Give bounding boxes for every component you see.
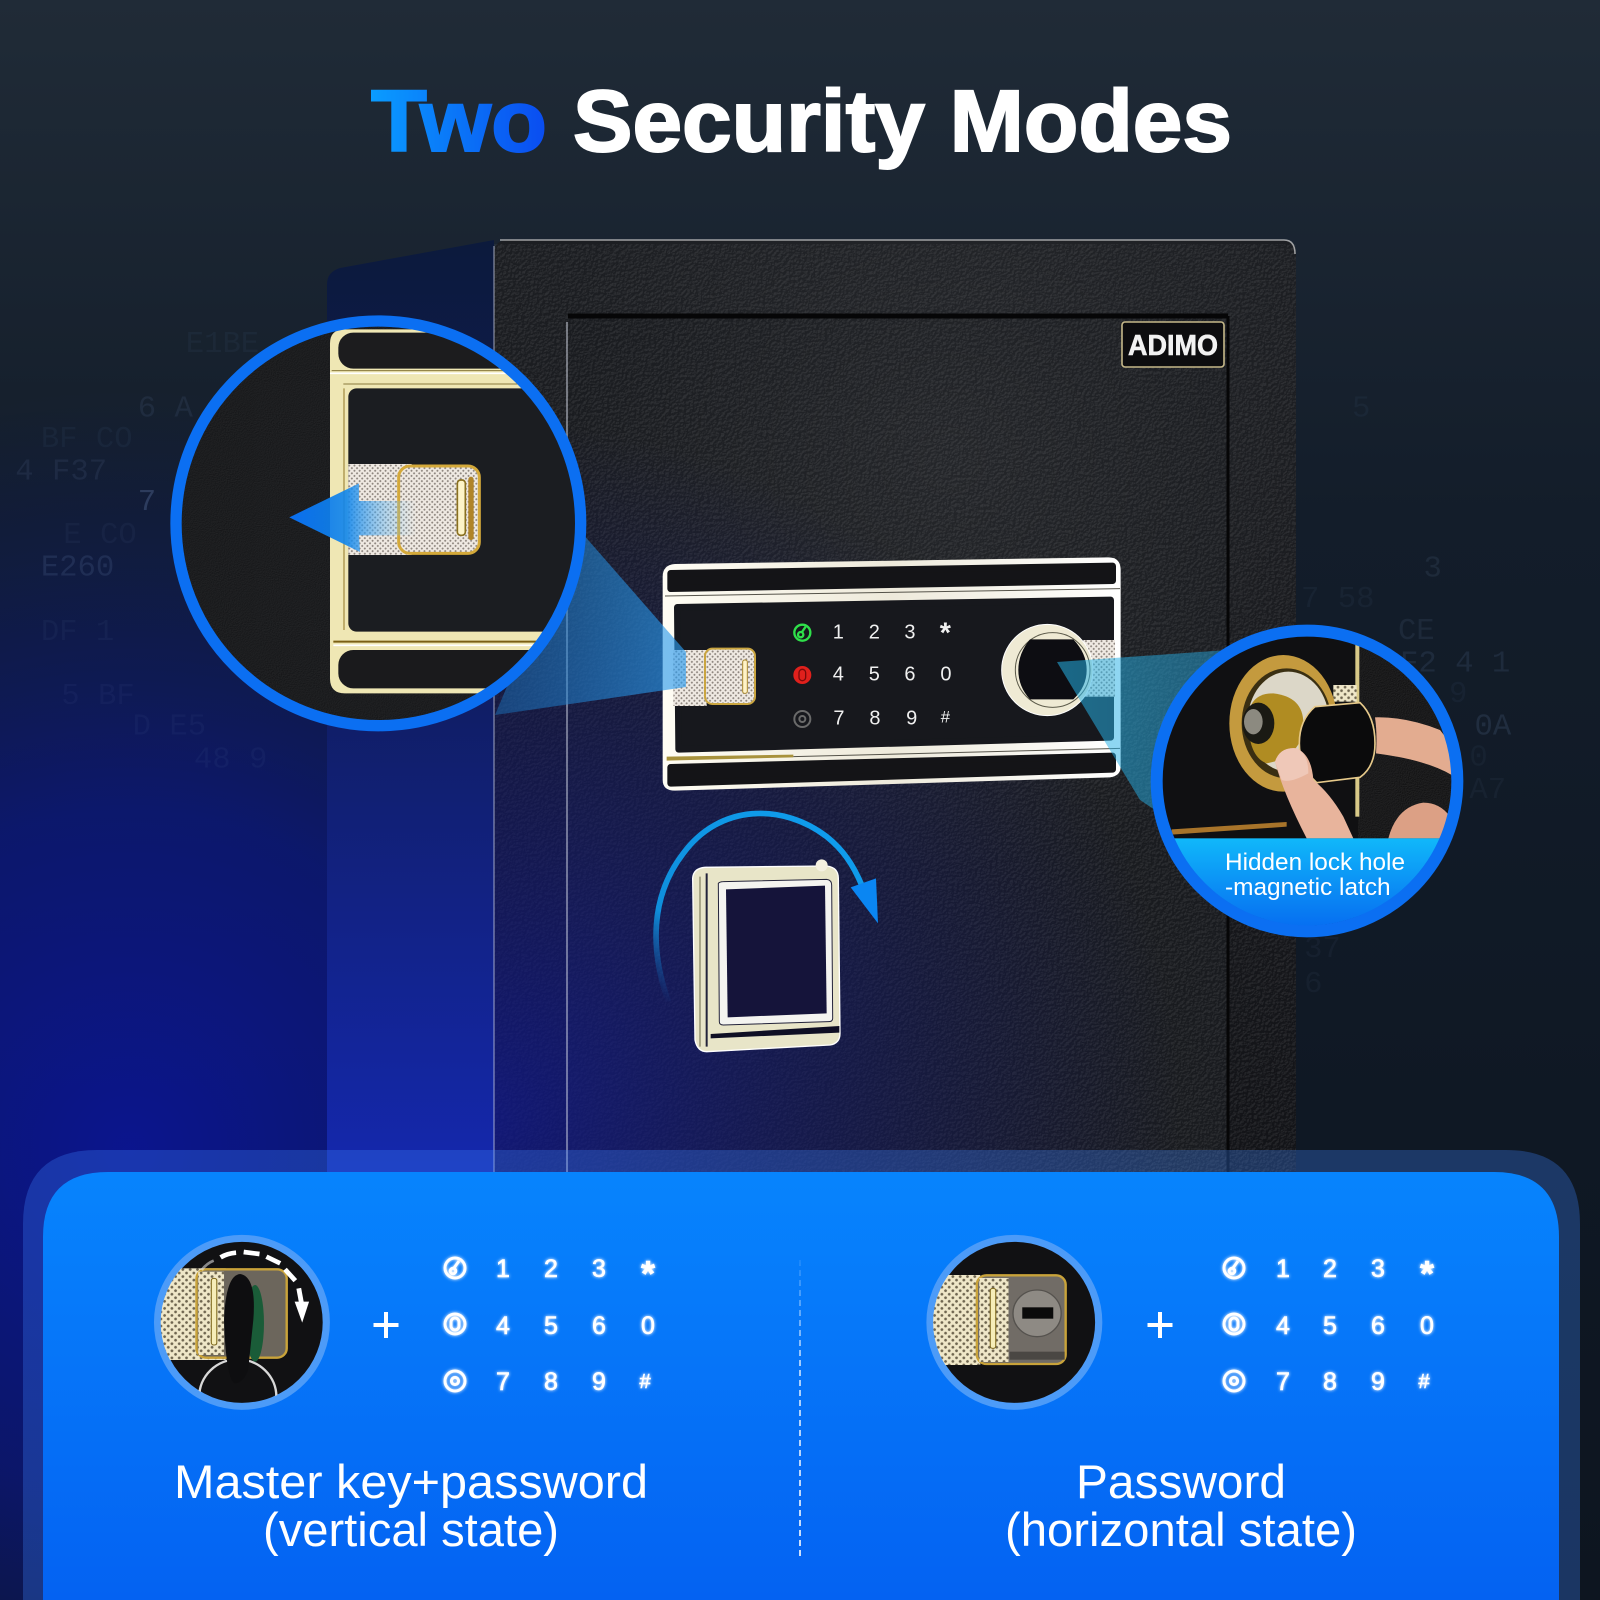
background code characters: 9: [1449, 678, 1467, 712]
background code characters: 37: [1304, 933, 1341, 967]
keypad digits: [833, 618, 952, 729]
unlock icon: [1224, 1258, 1244, 1278]
background code characters: BF CO: [41, 423, 133, 457]
rotation dashes: [202, 1252, 302, 1303]
safe side panel: [327, 240, 494, 1190]
bottom panel outer frame: [23, 1150, 1580, 1600]
mode 2 digits: 123: [1276, 1255, 1385, 1283]
title: [371, 72, 1232, 170]
mode 1 digits: 123: [496, 1255, 606, 1283]
background code characters: 5: [1352, 392, 1370, 426]
mode 1 key image: [158, 1238, 326, 1434]
mode 1 caption: Master key+password: [174, 1455, 648, 1508]
callout caption: Hidden lock hole: [1225, 850, 1405, 876]
handle plate: [693, 859, 840, 1052]
background code characters: [15, 328, 1512, 1002]
mode 2 digits: #: [1418, 1371, 1430, 1393]
light beam: left callout to latch: [495, 525, 686, 715]
status icon: unlock green: [794, 625, 810, 641]
divider: [799, 1260, 801, 1558]
fingers: [1375, 717, 1452, 775]
status icon: lock red: [793, 666, 811, 684]
background code characters: 48 9: [194, 743, 267, 777]
mode 2 caption: (horizontal state): [1005, 1503, 1357, 1556]
magnetic cover: [1299, 703, 1375, 783]
brand badge: [1122, 322, 1224, 367]
callout: right hidden lock hole: [1140, 620, 1480, 940]
keypad digits: 123: [833, 622, 916, 644]
background code characters: 3: [1423, 553, 1442, 587]
mode 1 caption: (vertical state): [263, 1503, 559, 1556]
title: Two: [371, 72, 547, 170]
handle dark inset: [726, 886, 827, 1017]
unlock icon: [445, 1258, 465, 1278]
keypad digits: *: [940, 618, 952, 650]
bottom blue panel: [43, 1172, 1559, 1600]
background code characters: A7: [1469, 774, 1506, 808]
background code characters: 7 58: [1301, 583, 1374, 617]
background code characters: 6 A: [138, 392, 193, 426]
lock ring: [1229, 655, 1337, 792]
top slot: [671, 566, 1113, 589]
background code characters: 0A: [1474, 711, 1512, 745]
slide latch: [673, 649, 755, 706]
lock icon: [445, 1314, 465, 1334]
mode 2 keypad icons: [1224, 1253, 1434, 1396]
fingerprint icon: [445, 1371, 465, 1391]
main black face: [677, 600, 1111, 749]
arrow: slide left: [289, 483, 417, 552]
background code characters: 4 F37: [15, 456, 107, 490]
mode 2 keyhole image: [930, 1238, 1099, 1406]
mode 2 caption: [1005, 1455, 1357, 1556]
bottom slot: [671, 756, 1113, 783]
mode 1 keypad icons: [445, 1253, 655, 1396]
mode 2 plus: [1148, 1312, 1172, 1338]
mode 2 digits: 4560: [1276, 1312, 1434, 1340]
mode 2 digits: 789: [1276, 1368, 1385, 1396]
mode 2 digits: [1276, 1253, 1434, 1396]
latch: [348, 464, 479, 555]
mode 1 digits: 789: [496, 1368, 606, 1396]
fingerprint icon: [1224, 1371, 1244, 1391]
background code characters: D E5: [133, 711, 206, 745]
background code characters: DF 1: [41, 616, 114, 650]
title: Security Modes: [573, 72, 1232, 170]
background code characters: 5 BF: [61, 680, 135, 714]
background code characters: E CO: [63, 519, 137, 553]
background code characters: 0: [1469, 741, 1488, 775]
callout caption: [1225, 850, 1405, 901]
mode 1 digits: *: [641, 1253, 655, 1294]
safe door: [567, 315, 1228, 1195]
mode 1 digits: #: [639, 1371, 651, 1393]
lock icon: [1224, 1314, 1244, 1334]
keypad digits: #: [941, 708, 951, 727]
caption band: [1174, 838, 1440, 926]
fingerprint reader ring: [1002, 624, 1115, 716]
safe body: [327, 240, 1296, 1195]
background code characters: 6: [1304, 968, 1322, 1002]
rotation arc: [656, 813, 862, 1002]
arrow head: [851, 878, 878, 923]
light beam: right callout to keyhole: [1057, 650, 1230, 860]
mode 1 caption: [174, 1455, 648, 1556]
mode 1 digits: 4560: [496, 1312, 655, 1340]
status icon: fingerprint: [794, 711, 810, 727]
rotating handle with arrow: [656, 813, 878, 1052]
mode 2 caption: Password: [1076, 1455, 1286, 1508]
safe front face: [494, 240, 1296, 1190]
callout caption: -magnetic latch: [1225, 875, 1391, 901]
keypad digits: 4560: [833, 664, 952, 686]
callout: left magnified latch: [170, 315, 586, 732]
mode 1 digits: [496, 1253, 655, 1396]
background code characters: F2 4 1: [1400, 647, 1510, 681]
brand badge: ADIMO: [1128, 330, 1218, 362]
mode 1 plus: [374, 1312, 398, 1338]
keypad panel: [663, 557, 1121, 791]
mode 2 digits: *: [1420, 1253, 1434, 1294]
background code characters: 7: [138, 486, 156, 520]
background code characters: E1BE: [186, 328, 259, 362]
background code characters: CE: [1398, 615, 1435, 649]
keypad digits: 789: [833, 707, 917, 729]
background code characters: E260: [41, 552, 114, 586]
